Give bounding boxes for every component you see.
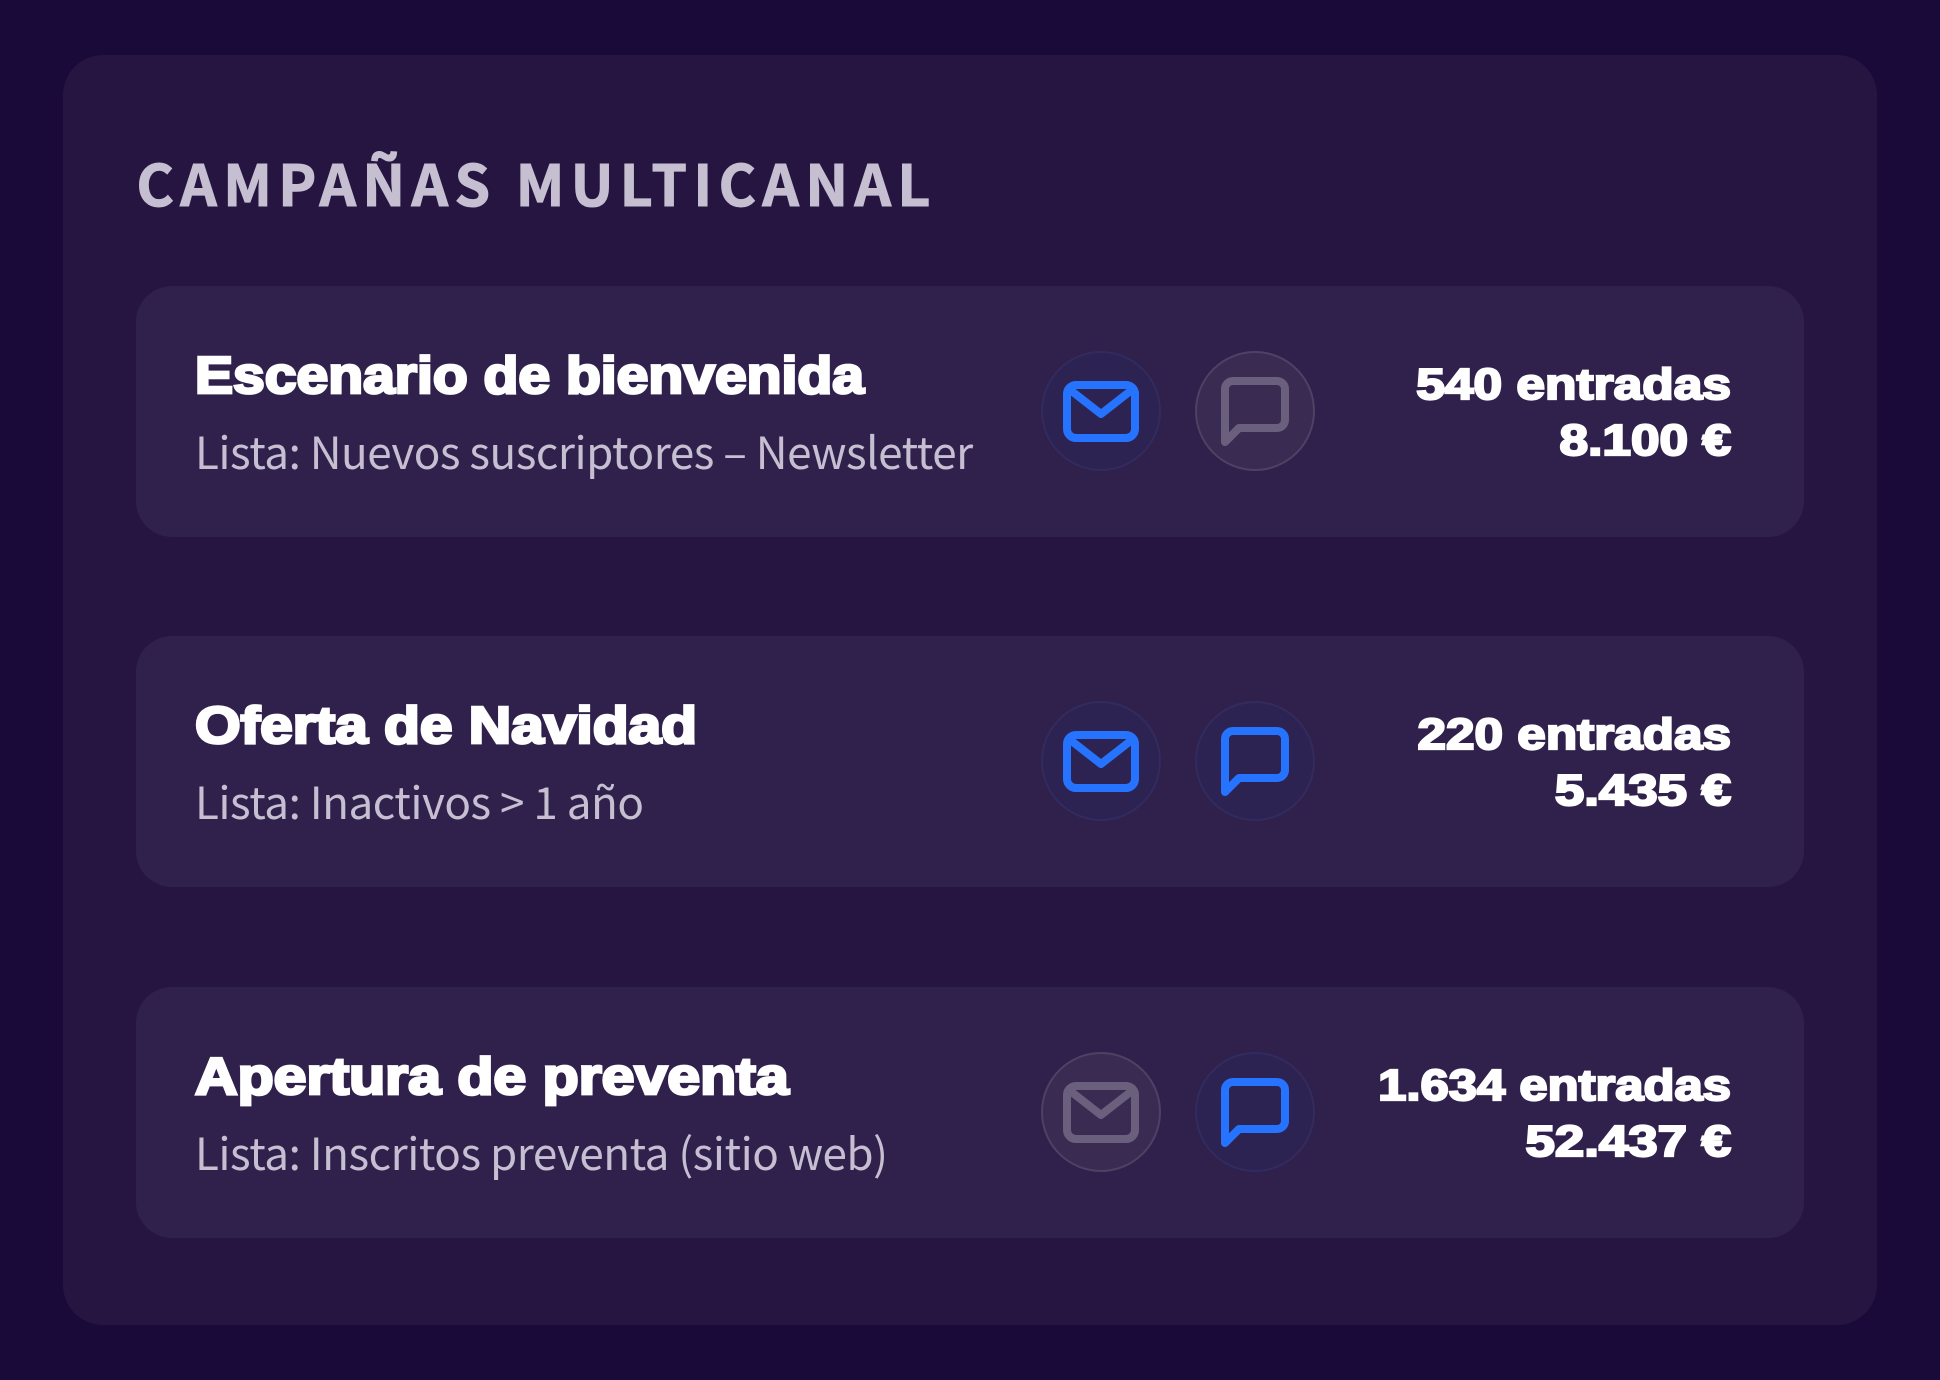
metrics — [1416, 360, 1732, 465]
metrics: 8.100 € — [1560, 416, 1731, 465]
icon: email active — [1041, 701, 1161, 821]
icon: chat active — [1195, 1052, 1315, 1172]
list name: Lista: Inscritos preventa (sitio web) — [195, 1119, 888, 1183]
metrics: 1.634 entradas — [1378, 1061, 1731, 1110]
card: Apertura de preventa — [136, 987, 1804, 1238]
campaign title: Escenario de bienvenida — [195, 347, 864, 405]
card: Oferta de Navidad — [136, 636, 1804, 887]
icon: chat active — [1195, 701, 1315, 821]
campaign title: Oferta de Navidad — [195, 697, 697, 755]
list name: Lista: Inactivos > 1 año — [195, 768, 644, 832]
list name: Lista: Nuevos suscriptores – Newsletter — [195, 418, 973, 482]
metrics — [1418, 710, 1732, 815]
metrics — [1378, 1061, 1732, 1166]
icon: email active — [1041, 351, 1161, 471]
icon: chat inactive — [1195, 351, 1315, 471]
icon: email inactive — [1041, 1052, 1161, 1172]
metrics: 220 entradas — [1418, 710, 1731, 759]
metrics: 52.437 € — [1525, 1117, 1731, 1166]
heading: CAMPAÑAS MULTICANAL — [136, 141, 937, 223]
card: Escenario de bienvenida — [136, 286, 1804, 537]
metrics: 5.435 € — [1555, 766, 1731, 815]
campaign title: Apertura de preventa — [195, 1048, 789, 1106]
metrics: 540 entradas — [1416, 360, 1731, 409]
